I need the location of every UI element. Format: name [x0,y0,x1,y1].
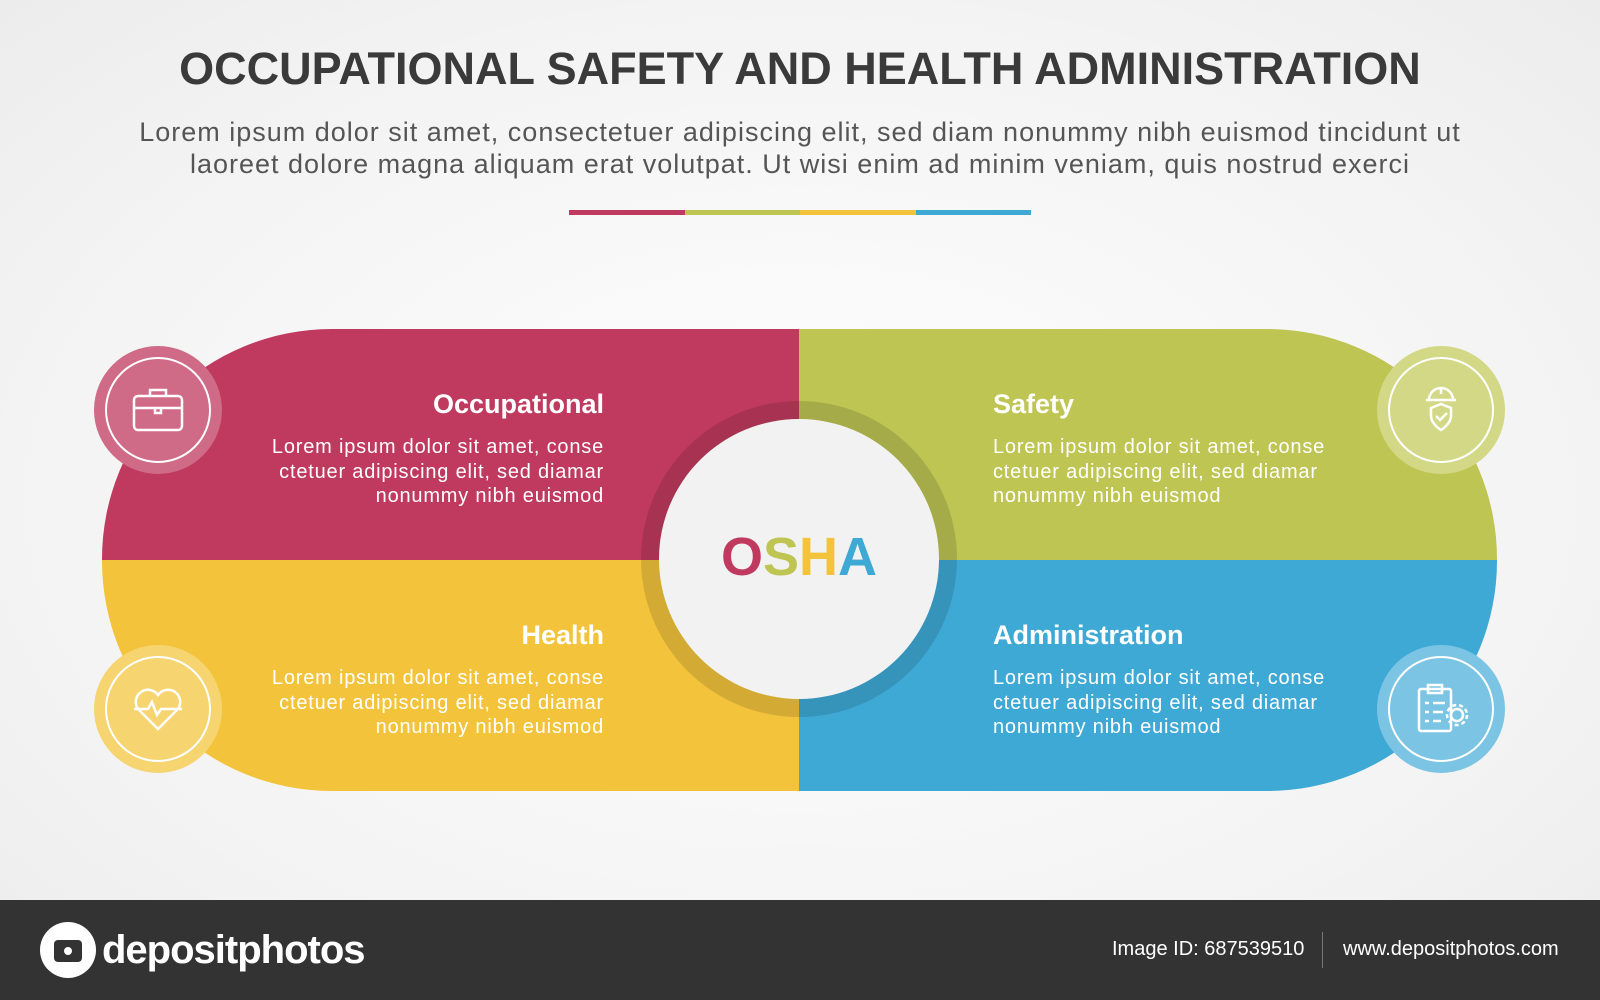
subtitle [139,117,1461,179]
panel: occupational: ctetuer adipiscing elit, sed diamar [279,460,604,482]
panel: health: Health [521,620,604,650]
color divider [569,210,1031,215]
pill diagram [102,329,1497,791]
panel: occupational: Occupational [433,389,604,419]
panel: administration [799,560,1497,791]
panel: occupational [102,329,799,560]
panel: administration: ctetuer adipiscing elit, sed diamar [993,692,1318,714]
OSHA label: OSHA [721,527,877,587]
panel: administration: Lorem ipsum dolor sit amet, conse [993,667,1325,689]
footer logo [40,922,365,978]
icon: clipboard gear [1377,645,1505,773]
panel: safety: nonummy nibh euismod [993,485,1221,507]
footer bar [0,900,1600,1000]
panel: health: Lorem ipsum dolor sit amet, conse [272,667,604,689]
panel: occupational: nonummy nibh euismod [376,485,604,507]
panel: health [102,560,799,791]
subtitle: Lorem ipsum dolor sit amet, consectetuer adipiscing elit, sed diam nonummy nibh euismod tincidunt ut [139,117,1461,147]
panel: safety: Lorem ipsum dolor sit amet, conse [993,436,1325,458]
panel: administration: nonummy nibh euismod [993,716,1221,738]
footer image id: Image ID: 687539510 [1112,938,1304,960]
subtitle: laoreet dolore magna aliquam erat volutpat. Ut wisi enim ad minim veniam, quis nostrud exerci [190,149,1410,179]
panel: safety [799,329,1497,560]
center circle [641,401,957,717]
panel: health: ctetuer adipiscing elit, sed diamar [279,692,604,714]
panel: administration: Administration [993,620,1184,650]
title: OCCUPATIONAL SAFETY AND HEALTH ADMINISTRATION [179,43,1421,94]
panel: occupational: Lorem ipsum dolor sit amet, conse [272,436,604,458]
icon: heart pulse [94,645,222,773]
panel: safety: ctetuer adipiscing elit, sed diamar [993,460,1318,482]
footer logo: depositphotos [102,928,365,972]
icon: briefcase [94,346,222,474]
icon: helmet shield [1377,346,1505,474]
footer url: www.depositphotos.com [1343,938,1559,960]
panel: safety: Safety [993,389,1074,419]
panel: health: nonummy nibh euismod [376,716,604,738]
